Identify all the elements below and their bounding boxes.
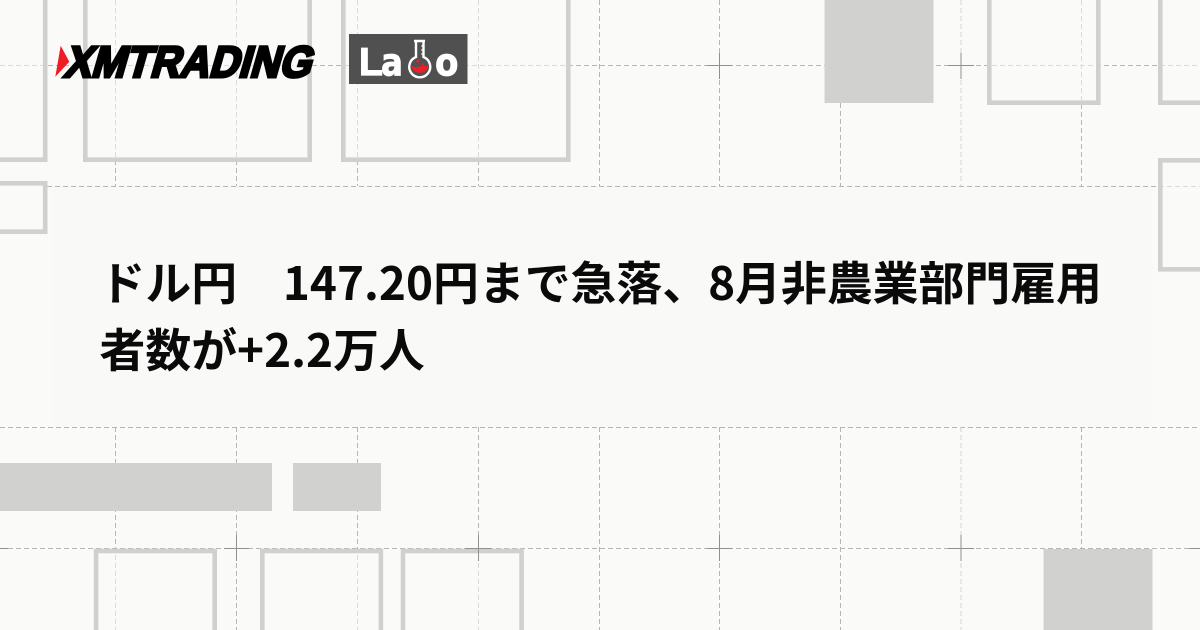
outline squares: bottom row xyxy=(96,551,522,630)
title xyxy=(100,248,1102,381)
logo: Lab: a xyxy=(381,40,403,84)
letter o: o xyxy=(435,40,458,84)
panel: title background xyxy=(52,187,1152,427)
icon: flask xyxy=(409,41,430,77)
logo background xyxy=(349,34,468,84)
logo: XMTRADING xyxy=(55,37,322,87)
title: 者数が+2.2万人 xyxy=(100,315,425,381)
outline squares: right and left middle xyxy=(0,160,1200,269)
title: ドル円 147.20円まで急落、8月非農業部門雇用 xyxy=(100,248,1102,314)
logo: Lab xyxy=(349,34,468,84)
outline squares: top row xyxy=(0,0,1200,160)
icon: red arrow xyxy=(55,46,69,77)
wordmark: XMTRADING xyxy=(60,37,322,87)
letters La: L xyxy=(359,41,383,84)
